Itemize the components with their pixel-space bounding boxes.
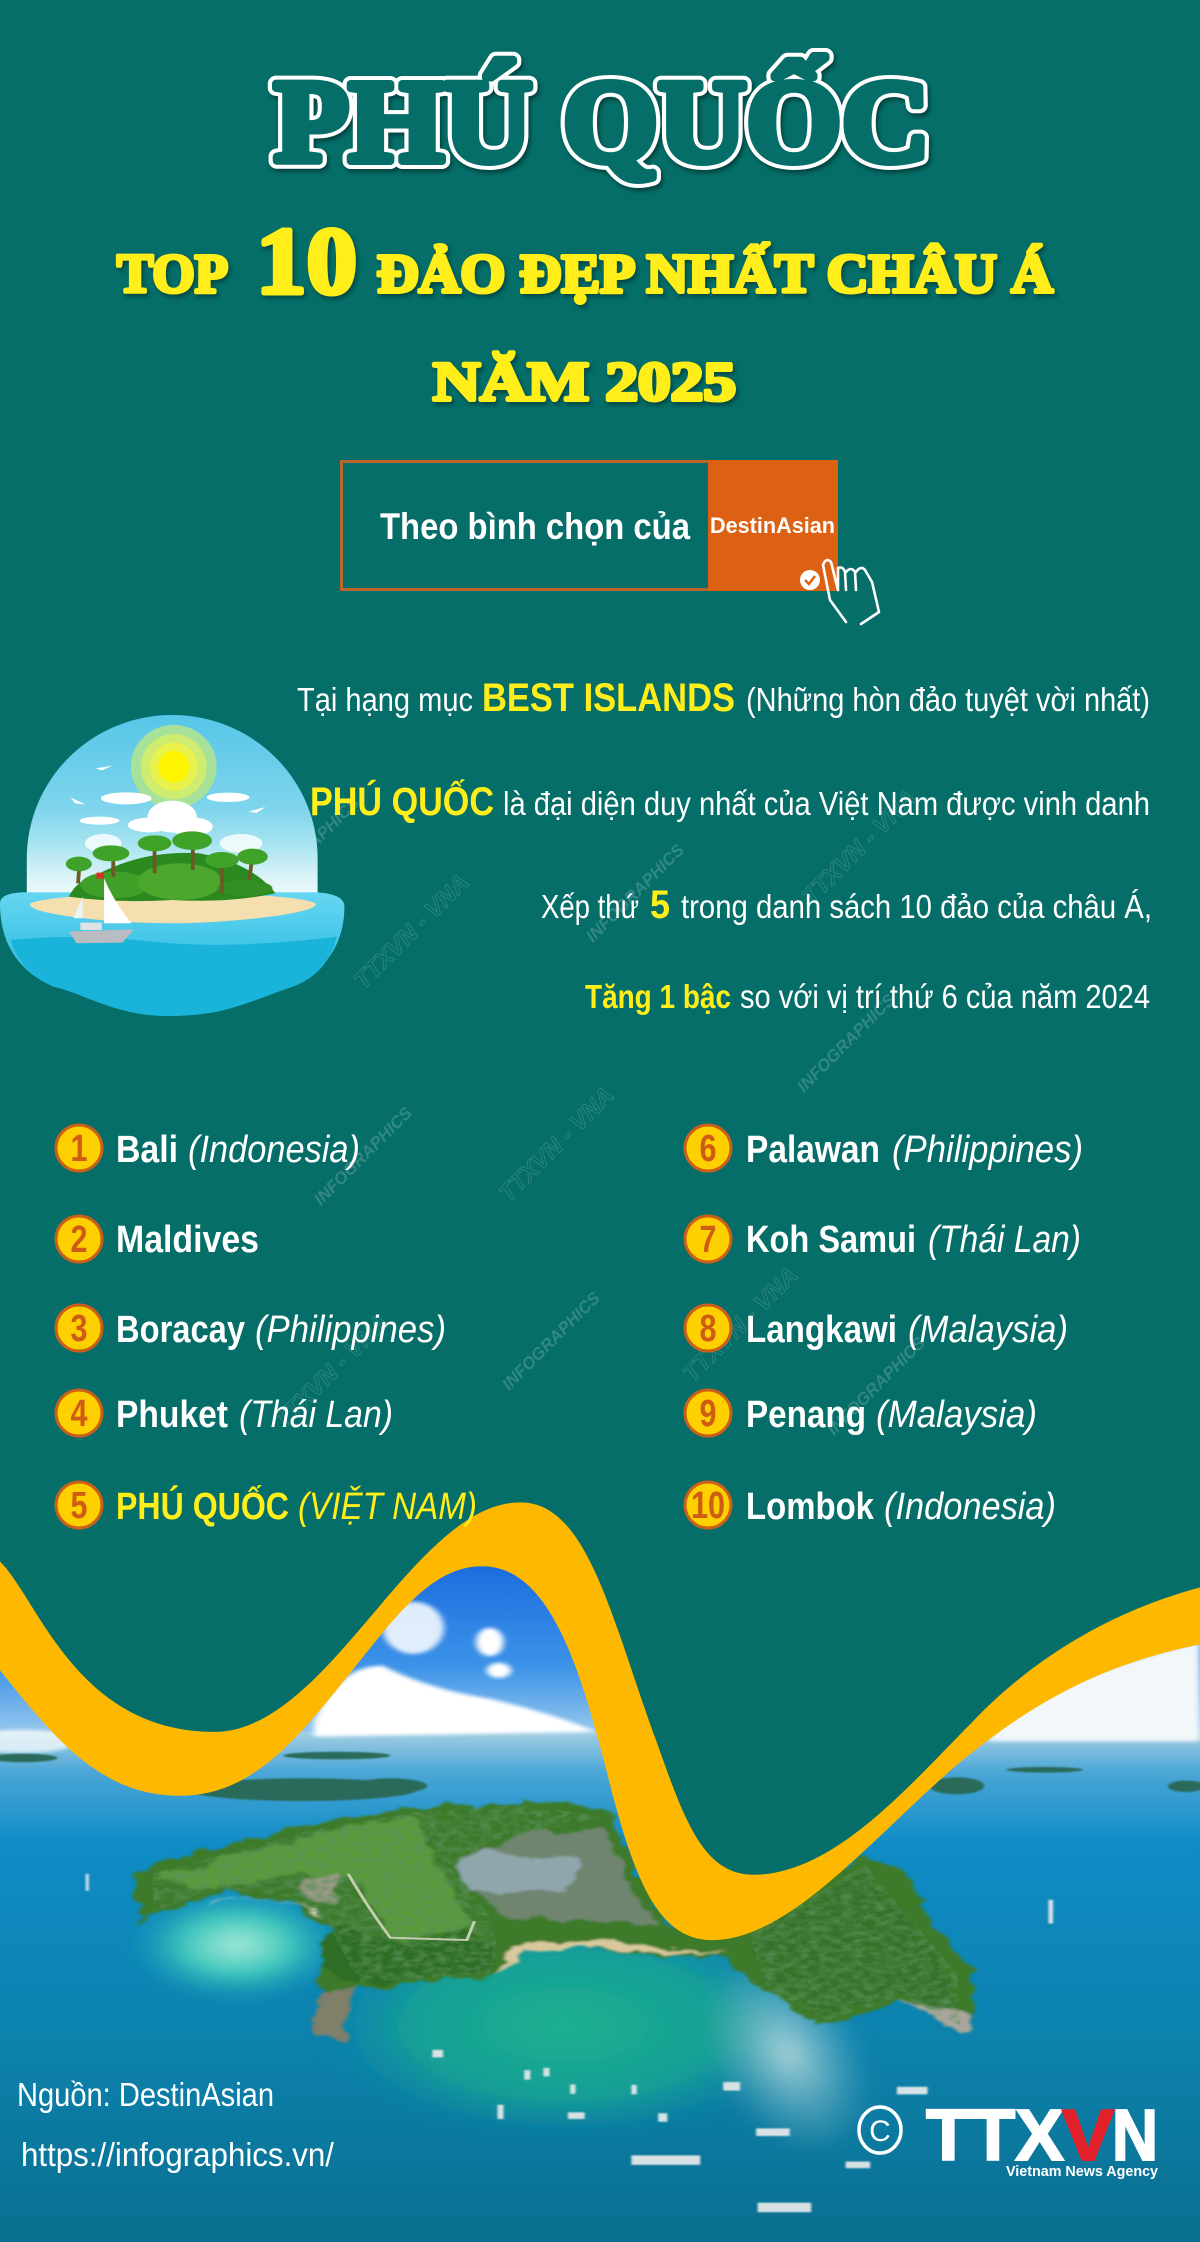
island — [138, 1800, 972, 2039]
item 9: (Malaysia) — [876, 1394, 1037, 1436]
watermarks: TTXVN - VNA — [349, 869, 475, 995]
intro text: PHÚ QUỐC — [310, 778, 494, 824]
item 6 — [685, 1125, 1083, 1171]
item 6: (Philippines) — [892, 1129, 1083, 1171]
photo: aerial view of Phu Quoc — [0, 1547, 1200, 2242]
clouds — [0, 1602, 1200, 1753]
intro text: trong danh sách 10 đảo của châu Á, — [681, 888, 1152, 925]
intro text: Tăng 1 bậc — [585, 978, 731, 1015]
website: https://infographics.vn/ — [21, 2136, 335, 2173]
logo text: DestinAsian — [710, 513, 835, 538]
watermarks: INFOGRAPHICS — [793, 990, 899, 1096]
watermarks: INFOGRAPHICS — [498, 1288, 604, 1394]
item 5: PHÚ QUỐC — [116, 1483, 289, 1528]
sea bowl — [0, 892, 344, 1016]
item 6: Palawan — [746, 1129, 880, 1171]
item 6: 6 — [700, 1128, 716, 1170]
road — [348, 1874, 474, 1940]
shallow water — [130, 1888, 898, 2165]
icon: sun — [131, 725, 217, 808]
watermarks: TTXVN - VNA — [678, 1262, 804, 1388]
item 2: Maldives — [116, 1219, 259, 1261]
item 8 — [685, 1305, 1068, 1351]
watermarks: TTXVN - VNA — [494, 1082, 620, 1208]
item 4: 4 — [70, 1393, 88, 1435]
voted by box — [342, 460, 879, 624]
subtitle: 10 — [256, 208, 357, 314]
item 2 — [56, 1216, 259, 1262]
item 5 — [56, 1482, 477, 1528]
item 1 — [56, 1125, 360, 1171]
logo: TTXVN: C — [869, 2115, 891, 2148]
intro text: BEST ISLANDS — [482, 676, 735, 720]
item 10: 10 — [691, 1485, 725, 1527]
item 4: Phuket — [116, 1394, 228, 1436]
logo: TTXVN: Vietnam News Agency — [1006, 2163, 1159, 2180]
item 10: (Indonesia) — [884, 1486, 1056, 1528]
intro text — [297, 676, 1152, 1015]
intro text: Tại hạng mục — [297, 681, 473, 718]
watermarks: TTXVN - VNA — [269, 1309, 395, 1435]
title: PHÚ QUỐC — [274, 55, 930, 187]
logo: TTXVN — [859, 2096, 1159, 2180]
teal upper area — [0, 1499, 1200, 1875]
item 4: (Thái Lan) — [239, 1394, 393, 1436]
item 1: Bali — [116, 1129, 178, 1171]
subtitle — [117, 208, 1053, 412]
item 3: 3 — [70, 1308, 88, 1350]
orange logo block — [708, 460, 838, 591]
watermarks — [257, 785, 929, 1439]
item 3 — [56, 1305, 446, 1351]
illustration: tropical island — [0, 715, 344, 1016]
subtitle: TOP — [117, 243, 228, 304]
watermarks: TTXVN - VNA — [797, 785, 923, 911]
palm trees and forest — [66, 831, 276, 901]
intro text: (Những hòn đảo tuyệt vời nhất) — [746, 681, 1150, 718]
item 5: (VIỆT NAM) — [298, 1485, 477, 1528]
icon: sailboat — [69, 873, 134, 943]
subtitle: ĐẢO ĐẸP NHẤT CHÂU Á — [377, 243, 1053, 304]
subtitle: NĂM 2025 — [433, 351, 736, 412]
item 7 — [685, 1216, 1081, 1262]
ranking list — [56, 1125, 1083, 1528]
title: PHÚ QUỐC — [274, 55, 930, 187]
icon: hand click — [800, 560, 879, 624]
distant islands — [0, 1752, 1200, 1801]
item 10 — [685, 1482, 1056, 1528]
intro text: so với vị trí thứ 6 của năm 2024 — [740, 978, 1150, 1015]
item 1: (Indonesia) — [188, 1129, 360, 1171]
intro text: Xếp thứ — [541, 888, 639, 925]
box text: Theo bình chọn của — [380, 506, 690, 547]
source: Nguồn: DestinAsian — [17, 2076, 274, 2113]
item 9: 9 — [700, 1393, 716, 1435]
item 7: 7 — [700, 1219, 716, 1261]
item 7: (Thái Lan) — [928, 1219, 1081, 1261]
item 3: (Philippines) — [255, 1309, 446, 1351]
watermarks: INFOGRAPHICS — [310, 1103, 416, 1209]
item 4 — [56, 1390, 393, 1436]
item 10: Lombok — [746, 1486, 875, 1528]
logo: TTXVN: TTX — [926, 2096, 1064, 2176]
watermarks: INFOGRAPHICS — [257, 793, 363, 899]
item 7: Koh Samui — [746, 1219, 916, 1261]
watermarks: INFOGRAPHICS — [582, 840, 688, 946]
item 8: 8 — [700, 1308, 716, 1350]
item 8: (Malaysia) — [908, 1309, 1068, 1351]
yellow wave — [0, 1499, 1200, 1940]
watermarks: INFOGRAPHICS — [823, 1333, 929, 1439]
item 2: 2 — [70, 1219, 88, 1261]
item 9: Penang — [746, 1394, 866, 1436]
forest texture — [153, 1805, 960, 2025]
logo: TTXVN: V — [1062, 2096, 1114, 2176]
item 1: 1 — [70, 1128, 88, 1170]
item 5: 5 — [70, 1485, 88, 1527]
clouds — [70, 766, 266, 853]
item 9 — [685, 1390, 1037, 1436]
item 8: Langkawi — [746, 1309, 897, 1351]
intro text: 5 — [650, 883, 670, 927]
item 3: Boracay — [116, 1309, 245, 1351]
logo: TTXVN: N — [1112, 2096, 1158, 2176]
boats — [86, 1874, 1053, 2212]
